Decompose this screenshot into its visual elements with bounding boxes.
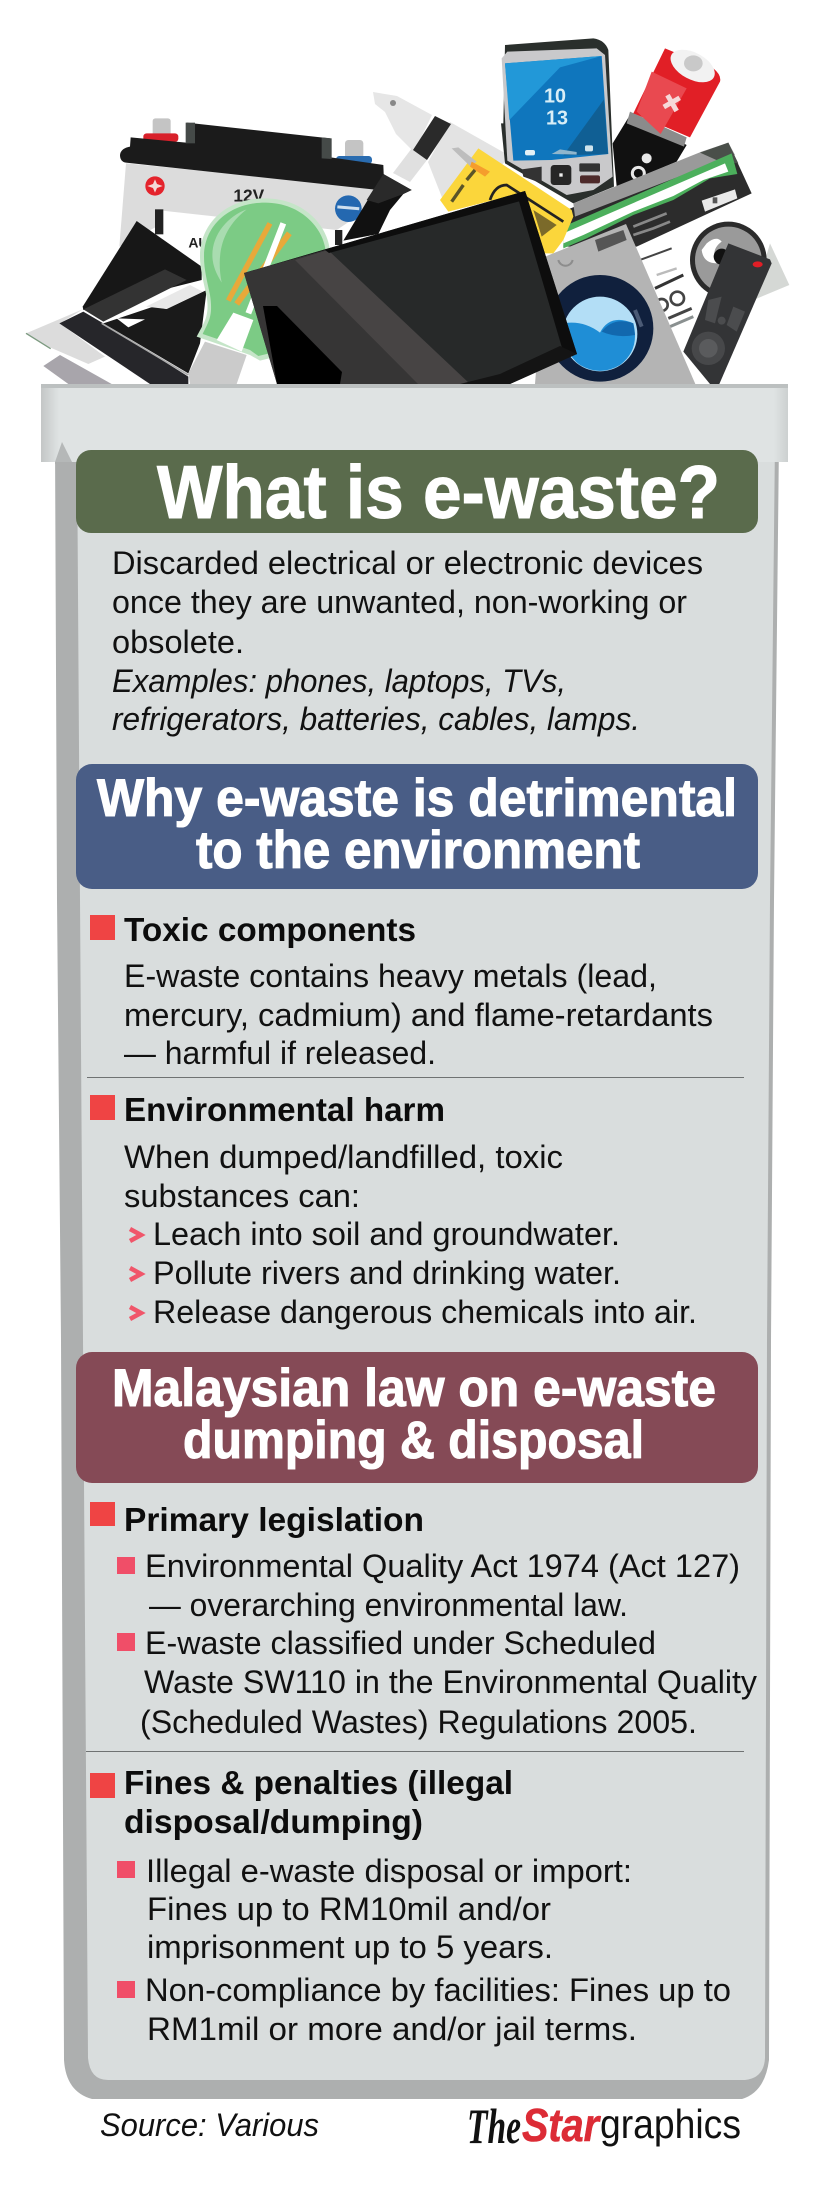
section: primary legislation: E-waste classified under Scheduled: [145, 1625, 656, 1661]
panel: Malaysian law heading: Malaysian law on e-waste: [112, 1359, 716, 1418]
text block: definition: once they are unwanted, non-working or: [112, 584, 687, 620]
section: primary legislation: Primary legislation: [124, 1501, 424, 1538]
icon: black tablet: [244, 191, 577, 384]
section: toxic components: — harmful if released.: [124, 1035, 436, 1071]
icon: green light bulb: [188, 198, 330, 384]
section: primary legislation: Waste SW110 in the Environmental Quality: [144, 1664, 757, 1700]
section: fines and penalties: imprisonment up to 5 years.: [147, 1929, 553, 1965]
section: environmental harm: Environmental harm: [124, 1091, 445, 1128]
icon: mobile phone: [501, 38, 614, 203]
text block: definition: [112, 545, 703, 737]
icon: yellow tool: [440, 147, 573, 253]
logo: The Star graphics: The: [467, 2098, 521, 2154]
section: environmental harm: Release dangerous chemicals into air.: [153, 1294, 697, 1330]
section: fines and penalties: Illegal e-waste disposal or import:: [146, 1853, 632, 1889]
section: toxic components: Toxic components: [124, 911, 416, 948]
section: toxic components: [90, 911, 713, 1071]
logo: The Star graphics: Star: [522, 2099, 601, 2151]
icon: circuit board: [563, 143, 752, 248]
section: fines and penalties: [90, 1764, 731, 2047]
section: environmental harm: substances can:: [124, 1178, 360, 1214]
text block: definition: Discarded electrical or electronic devices: [112, 545, 703, 581]
panel: Malaysian law heading: [76, 1352, 758, 1483]
section: fines and penalties: RM1mil or more and/or jail terms.: [147, 2011, 637, 2047]
icon: broken laptop: [26, 221, 207, 384]
section: environmental harm: [90, 1091, 697, 1330]
icon: car battery: 12V: [233, 186, 265, 206]
section: toxic components: mercury, cadmium) and flame-retardants: [124, 997, 713, 1033]
bin body with side shading: [55, 440, 779, 2099]
section: environmental harm: Leach into soil and groundwater.: [153, 1216, 620, 1252]
icon: AA battery: [613, 43, 720, 187]
section: primary legislation: Environmental Quality Act 1974 (Act 127): [145, 1548, 740, 1584]
section: fines and penalties: disposal/dumping): [124, 1803, 423, 1840]
icon: car battery: [119, 118, 412, 250]
panel: why e-waste is detrimental heading: [76, 764, 758, 889]
section: environmental harm: Pollute rivers and drinking water.: [153, 1255, 621, 1291]
text block: definition: refrigerators, batteries, cables, lamps.: [112, 701, 640, 737]
panel: why e-waste is detrimental heading: to the environment: [196, 821, 640, 880]
icon: white drill pen: [373, 92, 510, 205]
icon: car battery: AU: [188, 234, 209, 250]
section: primary legislation: [90, 1501, 757, 1740]
section: primary legislation: (Scheduled Wastes) Regulations 2005.: [140, 1704, 697, 1740]
panel: what is e-waste heading: What is e-waste?: [157, 450, 720, 534]
icon: washing machine: [535, 224, 695, 384]
icon: boom box radio: [640, 222, 789, 327]
section: primary legislation: — overarching environmental law.: [149, 1587, 628, 1623]
section: environmental harm: When dumped/landfilled, toxic: [124, 1139, 563, 1175]
section: fines and penalties: Fines up to RM10mil and/or: [147, 1891, 551, 1927]
panel: why e-waste is detrimental heading: Why e-waste is detrimental: [97, 769, 737, 828]
icon: remote control: [683, 243, 772, 384]
logo: The Star graphics: graphics: [600, 2101, 741, 2147]
illustration: pile of electronic waste: [26, 38, 789, 384]
text block: definition: Examples: phones, laptops, TVs,: [112, 663, 566, 699]
section: toxic components: E-waste contains heavy metals (lead,: [124, 958, 657, 994]
text block: definition: obsolete.: [112, 624, 244, 660]
section: fines and penalties: Fines & penalties (illegal: [124, 1764, 513, 1801]
section: fines and penalties: Non-compliance by facilities: Fines up to: [145, 1972, 731, 2008]
panel: Malaysian law heading: dumping & disposal: [183, 1411, 644, 1470]
icon: mobile phone: 10: [544, 86, 566, 108]
bin rim: [41, 384, 788, 464]
logo: The Star graphics: [467, 2098, 741, 2154]
source note: Source: Various: [100, 2107, 319, 2143]
icon: mobile phone: 13: [546, 108, 568, 130]
